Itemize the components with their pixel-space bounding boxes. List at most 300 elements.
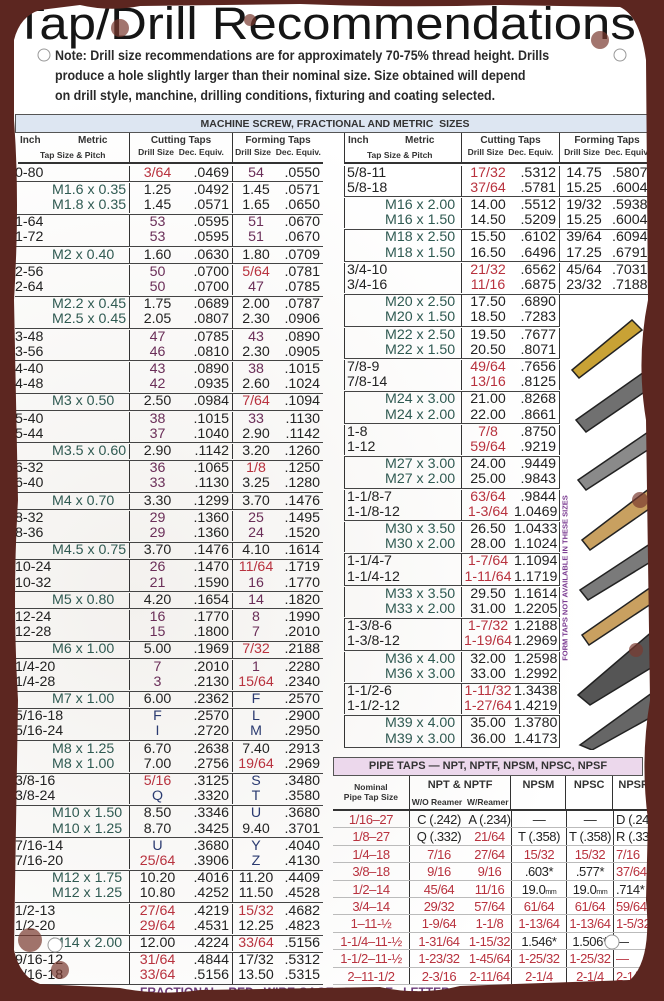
left table: machine screw sizes: 1.45: [242, 182, 270, 198]
left table: machine screw sizes: 5.00: [144, 641, 171, 657]
left table: machine screw sizes: .1654: [193, 592, 229, 608]
left table: machine screw sizes: .1024: [284, 376, 320, 392]
left table: machine screw sizes: 29: [150, 510, 165, 526]
left table: machine screw sizes: 2-64: [15, 279, 43, 295]
left table: machine screw sizes: .4252: [193, 885, 229, 901]
right table: larger sizes: .6562: [520, 262, 556, 278]
pipe taps table: T (.358): [569, 829, 611, 844]
left table: machine screw sizes: 8-36: [15, 525, 43, 541]
left table: machine screw sizes: .1476: [284, 493, 320, 509]
left table: machine screw sizes: .0550: [284, 164, 320, 180]
pipe taps table: 2-3/16: [422, 969, 456, 984]
right table: larger sizes: 25.00: [470, 471, 506, 487]
right table: larger sizes: 1.2188: [514, 618, 557, 634]
left table: machine screw sizes: 15/32: [238, 903, 274, 919]
left table: machine screw sizes: .2570: [193, 708, 229, 724]
right table header: [344, 133, 654, 164]
right table: larger sizes: 3/4-16: [347, 277, 387, 293]
left table: machine screw sizes: .5312: [284, 952, 320, 968]
right table: larger sizes: 19/32: [566, 197, 602, 213]
left table: machine screw sizes: 5/16-24: [15, 723, 63, 739]
left table: machine screw sizes: 25: [248, 510, 264, 526]
pipe taps table: C (.242): [417, 812, 461, 827]
left table: machine screw sizes: .1040: [193, 426, 229, 442]
left table: machine screw sizes: 1/4-28: [15, 674, 55, 690]
right table: larger sizes: 49/64: [470, 359, 506, 375]
left table: machine screw sizes: 50: [150, 264, 165, 280]
left table: machine screw sizes: 4.20: [144, 592, 171, 608]
right table: larger sizes: .6004: [612, 180, 648, 196]
left table: machine screw sizes: 5/64: [242, 264, 270, 280]
right table: larger sizes: 14.50: [470, 212, 506, 228]
left table: machine screw sizes: 47: [150, 329, 165, 345]
left table: machine screw sizes: 9/16-18: [15, 967, 63, 983]
left table: machine screw sizes: .0492: [193, 182, 229, 198]
right table: larger sizes: M18 x 1.50: [385, 245, 455, 261]
left table: machine screw sizes: .0890: [193, 361, 229, 377]
right table: larger sizes: 16.50: [470, 245, 506, 261]
left table: machine screw sizes: 11.50: [239, 885, 273, 901]
right table header: Drill Size Dec. Equiv.: [468, 147, 553, 157]
left table header: Tap Size & Pitch: [40, 150, 106, 160]
left table: machine screw sizes: 2.30: [242, 344, 270, 360]
right table: larger sizes: 7/8-9: [347, 359, 379, 375]
left table: machine screw sizes: .0670: [284, 229, 320, 245]
right table: larger sizes: .7188: [612, 277, 648, 293]
section band: pipe taps: [333, 757, 643, 776]
left table: machine screw sizes: .1614: [284, 542, 320, 558]
right table: larger sizes: 1-3/8-12: [347, 633, 400, 649]
pipe table header: Nominal: [354, 782, 388, 792]
left table: machine screw sizes: .2950: [284, 723, 320, 739]
section band: machine screw: [15, 114, 655, 133]
right table: larger sizes: 1.2969: [514, 633, 557, 649]
left table: machine screw sizes: 15/64: [238, 674, 274, 690]
right table: larger sizes: M20 x 2.50: [385, 294, 455, 310]
section band: machine screw: MACHINE SCREW, FRACTIONAL AND METRIC SIZES: [201, 118, 469, 130]
left table: machine screw sizes: U: [152, 838, 163, 854]
left table: machine screw sizes: .1130: [286, 411, 320, 427]
left table: machine screw sizes: 2.30: [242, 311, 270, 327]
left table: machine screw sizes: .1130: [195, 475, 229, 491]
left table: machine screw sizes: 46: [150, 344, 165, 360]
left table: machine screw sizes: 54: [248, 164, 264, 180]
left table: machine screw sizes: 5-40: [15, 411, 43, 427]
right table: larger sizes: 5/8-11: [347, 164, 386, 180]
left table: machine screw sizes: M7 x 1.00: [52, 691, 114, 707]
right table: larger sizes: 7/8-14: [347, 374, 387, 390]
left table: machine screw sizes: U: [251, 805, 261, 821]
right table: larger sizes: .7656: [520, 359, 556, 375]
left table: machine screw sizes: F: [252, 691, 260, 707]
right table: larger sizes: M30 x 3.50: [385, 521, 455, 537]
right table: larger sizes: 29.50: [470, 586, 506, 602]
left table: machine screw sizes: 10-24: [15, 559, 51, 575]
pipe taps table: 1-25/32: [569, 951, 611, 966]
left table: machine screw sizes: .1094: [284, 393, 320, 409]
pipe taps table: 1–11-½: [351, 916, 391, 931]
left table: machine screw sizes: 42: [150, 376, 165, 392]
right table: larger sizes: 15.50: [470, 229, 506, 245]
left table: machine screw sizes: .0781: [284, 264, 320, 280]
left table: machine screw sizes: .0700: [193, 279, 229, 295]
left table: machine screw sizes: 1/2-20: [15, 918, 55, 934]
left table: machine screw sizes: .0709: [284, 247, 320, 263]
left table: machine screw sizes: 50: [150, 279, 165, 295]
pipe taps table: .714*: [616, 882, 644, 897]
right table: larger sizes: .7677: [520, 327, 556, 343]
left table: machine screw sizes: 3-56: [15, 344, 43, 360]
left table: machine screw sizes: .4409: [284, 870, 320, 886]
pipe taps table: 1-15/32: [469, 934, 510, 949]
right table: larger sizes: .5209: [520, 212, 556, 228]
left table: machine screw sizes: 8.50: [144, 805, 171, 821]
right table: larger sizes: .6102: [520, 229, 556, 245]
pipe taps table: 1-25/32: [518, 951, 560, 966]
left table header: Metric: [78, 135, 107, 146]
left table: machine screw sizes: 3/8-24: [15, 788, 55, 804]
left table: machine screw sizes: .3906: [193, 853, 229, 869]
left table: machine screw sizes: 43: [248, 329, 264, 345]
left table: machine screw sizes: .0469: [193, 164, 229, 180]
right table: larger sizes: 1-8: [347, 424, 368, 440]
left table: machine screw sizes: .2010: [193, 659, 229, 675]
left table: machine screw sizes: 47: [248, 279, 264, 295]
right table: larger sizes: 3/4-10: [347, 262, 387, 278]
right table: larger sizes: 5/8-18: [347, 180, 387, 196]
left table: machine screw sizes: 37: [150, 426, 165, 442]
left table header: Drill Size Dec. Equiv.: [235, 147, 321, 157]
right table: larger sizes: 1-11/64: [464, 569, 512, 585]
right table: larger sizes: 1.2598: [514, 651, 557, 667]
left table: machine screw sizes: .1015: [284, 361, 320, 377]
left table: machine screw sizes: 10.80: [140, 885, 175, 901]
left table: machine screw sizes: .1360: [193, 510, 229, 526]
right table: larger sizes: 63/64: [470, 489, 506, 505]
left table: machine screw sizes: .4823: [284, 918, 320, 934]
right table: larger sizes: 1.1024: [514, 536, 557, 552]
left table: machine screw sizes: .0807: [193, 311, 229, 327]
right table header: Metric: [405, 135, 434, 146]
left table: machine screw sizes: .0571: [284, 182, 320, 198]
right table: larger sizes: 1.4173: [514, 731, 557, 747]
left table: machine screw sizes: M12 x 1.75: [52, 870, 122, 886]
left table: machine screw sizes: .1520: [284, 525, 320, 541]
right table: larger sizes: M27 x 2.00: [385, 471, 455, 487]
right table: larger sizes: 11/16: [471, 277, 505, 293]
left table: machine screw sizes: 8-32: [15, 510, 43, 526]
pipe taps table: 11/16: [475, 882, 504, 897]
pipe taps table: 27/64: [474, 847, 505, 862]
legend: FRACTIONAL - RED WIRE GAGE - PURPLE LETTER SIZE - BLUE: [140, 985, 523, 999]
left table: machine screw sizes: .1770: [193, 609, 229, 625]
left table: machine screw sizes: M3.5 x 0.60: [52, 443, 126, 459]
left table: machine screw sizes: 9.40: [242, 821, 270, 837]
left table: machine screw sizes: 3-48: [15, 329, 43, 345]
left table: machine screw sizes: 33: [248, 411, 264, 427]
pipe taps table: 2-11/64: [469, 969, 510, 984]
right table: larger sizes: 24.00: [470, 456, 506, 472]
pipe taps table: 2-1/4: [616, 969, 644, 984]
left table: machine screw sizes: .0689: [193, 296, 229, 312]
pipe taps table: 57/64: [474, 899, 505, 914]
left table: machine screw sizes: .1470: [193, 559, 229, 575]
left table: machine screw sizes: 38: [150, 411, 165, 427]
right table: larger sizes: 1.1719: [514, 569, 557, 585]
right table: larger sizes: 23/32: [566, 277, 602, 293]
left table: machine screw sizes: .2340: [284, 674, 320, 690]
left table: machine screw sizes: 31/64: [140, 952, 175, 968]
left table: machine screw sizes: M2.2 x 0.45: [52, 296, 126, 312]
left table: machine screw sizes: .1142: [286, 426, 320, 442]
right table: larger sizes: .7283: [520, 309, 556, 325]
pipe taps table: 1.546*: [521, 934, 557, 949]
left table: machine screw sizes: 4-48: [15, 376, 43, 392]
left table: machine screw sizes: 27/64: [140, 903, 175, 919]
left table: machine screw sizes: 14: [248, 592, 264, 608]
right table: larger sizes: 18.50: [470, 309, 506, 325]
left table: machine screw sizes: 1.60: [144, 247, 171, 263]
left table: machine screw sizes: M1.8 x 0.35: [52, 197, 126, 213]
left table: machine screw sizes: .3680: [284, 805, 320, 821]
left table: machine screw sizes: 53: [150, 229, 165, 245]
left table: machine screw sizes: .4219: [193, 903, 229, 919]
pipe taps table: 7/16: [427, 847, 451, 862]
left table: machine screw sizes: .2900: [284, 708, 320, 724]
left table: machine screw sizes: M2 x 0.40: [52, 247, 114, 263]
left table: machine screw sizes: M12 x 1.25: [52, 885, 122, 901]
right table: larger sizes: .9844: [520, 489, 556, 505]
left table: machine screw sizes: .2756: [193, 756, 229, 772]
right table: larger sizes: M24 x 2.00: [385, 407, 455, 423]
left table: machine screw sizes: .1770: [284, 575, 320, 591]
right table: larger sizes: .5312: [520, 164, 556, 180]
right table: larger sizes: 21/32: [470, 262, 506, 278]
right table: larger sizes: 1-1/2-12: [347, 698, 400, 714]
pipe taps table: 1.506*: [572, 934, 608, 949]
right table: larger sizes: 1-1/4-12: [347, 569, 400, 585]
right table: larger sizes: .8071: [520, 342, 556, 358]
pipe taps table: 59/64: [616, 899, 647, 914]
right table: larger sizes: 13/16: [470, 374, 506, 390]
right table: larger sizes: 35.00: [470, 715, 506, 731]
pipe taps table: 1-31/64: [418, 934, 460, 949]
left table: machine screw sizes: 2.50: [144, 393, 171, 409]
right table: larger sizes: M33 x 3.50: [385, 586, 455, 602]
left table: machine screw sizes: 2-56: [15, 264, 43, 280]
left table: machine screw sizes: .3680: [193, 838, 229, 854]
vertical note: form taps not available: FORM TAPS NOT AVAILABLE IN THESE SIZES: [560, 495, 570, 661]
left table: machine screw sizes: .1142: [195, 443, 229, 459]
left table: machine screw sizes: 2.90: [144, 443, 171, 459]
right table: larger sizes: M39 x 3.00: [385, 731, 455, 747]
left table: machine screw sizes: 16: [150, 609, 165, 625]
left table: machine screw sizes: .0906: [284, 311, 320, 327]
pipe taps table: —: [533, 812, 545, 827]
left table: machine screw sizes: .3425: [193, 821, 229, 837]
right table: larger sizes: .6004: [612, 212, 648, 228]
left table: machine screw sizes: Y: [251, 838, 261, 854]
pipe table header: NPSC: [574, 779, 604, 791]
pipe taps table: 1-9/64: [422, 916, 456, 931]
pipe taps table: 1-13/64: [569, 916, 611, 931]
pipe taps table: —: [584, 812, 596, 827]
right table: larger sizes: .5807: [612, 164, 648, 180]
right table: larger sizes: 1.4219: [514, 698, 557, 714]
pipe taps table: 61/64: [524, 899, 554, 914]
right table: larger sizes: 17.25: [566, 245, 602, 261]
note text: on drill style, manchine, drilling conditions, fixturing and coating selected.: [55, 88, 495, 103]
left table: machine screw sizes: 1.25: [144, 182, 171, 198]
right table: larger sizes: M22 x 2.50: [385, 327, 455, 343]
left table: machine screw sizes: .4224: [193, 935, 229, 951]
pipe taps table: 1-13/64: [518, 916, 560, 931]
left table: machine screw sizes: 3.30: [144, 493, 171, 509]
left table: machine screw sizes: 7/16-20: [15, 853, 63, 869]
left table: machine screw sizes: F: [153, 708, 162, 724]
left table: machine screw sizes: .1015: [193, 411, 229, 427]
right table: larger sizes: 1.1094: [514, 553, 557, 569]
left table: machine screw sizes: 1.75: [144, 296, 171, 312]
left table: machine screw sizes: 29/64: [140, 918, 175, 934]
left table: machine screw sizes: .2010: [284, 624, 320, 640]
left table: machine screw sizes: 7.00: [144, 756, 171, 772]
right table: larger sizes: .8750: [520, 424, 556, 440]
pipe taps table: 1-1/2–11-½: [340, 951, 402, 966]
left table: machine screw sizes: .0810: [193, 344, 229, 360]
left table: machine screw sizes: 10.20: [140, 870, 175, 886]
pipe taps table: 15/32: [524, 847, 554, 862]
left table: machine screw sizes: 1/4-20: [15, 659, 55, 675]
left table: machine screw sizes: .1260: [284, 443, 320, 459]
right table: larger sizes: 14.00: [470, 197, 506, 213]
left table: machine screw sizes: .1969: [193, 641, 229, 657]
left table: machine screw sizes: 7.40: [242, 741, 270, 757]
left table: machine screw sizes: 7: [154, 659, 161, 675]
left table: machine screw sizes: .0650: [284, 197, 320, 213]
pipe taps table: 1/8–27: [352, 829, 390, 844]
pipe table header: NPT & NPTF: [428, 779, 492, 791]
pipe taps table: 9/16: [427, 864, 451, 879]
left table: machine screw sizes: .1590: [193, 575, 229, 591]
right table: larger sizes: 1-3/64: [468, 504, 508, 520]
right table: larger sizes: 39/64: [566, 229, 602, 245]
right table: larger sizes: .9449: [520, 456, 556, 472]
left table: machine screw sizes: .2969: [284, 756, 320, 772]
left table: machine screw sizes: M14 x 2.00: [52, 935, 122, 951]
pipe taps table: 2-1/4: [576, 969, 604, 984]
right table: larger sizes: M24 x 3.00: [385, 391, 455, 407]
left table: machine screw sizes: .5315: [284, 967, 320, 983]
left table header: Cutting Taps: [151, 135, 211, 146]
left table: machine screw sizes: .1495: [284, 510, 320, 526]
right table: larger sizes: .9219: [520, 439, 556, 455]
left table: machine screw sizes: .0935: [193, 376, 229, 392]
left table: machine screw sizes: 25/64: [140, 853, 175, 869]
pipe taps table: 61/64: [575, 899, 605, 914]
right table: larger sizes: .5781: [520, 180, 556, 196]
pipe table header: Pipe Tap Size: [344, 792, 398, 802]
left table: machine screw sizes: 13.50: [238, 967, 274, 983]
left table: machine screw sizes: 3/8-16: [15, 773, 55, 789]
left table: machine screw sizes: .0670: [284, 214, 320, 230]
right table: larger sizes: 21.00: [470, 391, 506, 407]
pipe taps table: 21/64: [474, 829, 505, 844]
left table: machine screw sizes: .0571: [193, 197, 229, 213]
pipe taps table: Q (.332): [417, 829, 461, 844]
right table: larger sizes: 15.25: [566, 180, 602, 196]
left table: machine screw sizes: 7/32: [242, 641, 270, 657]
left table: machine screw sizes: .2720: [193, 723, 229, 739]
left table: machine screw sizes: 0-80: [15, 164, 43, 180]
left table: machine screw sizes: 21: [150, 575, 165, 591]
right table: larger sizes: .6875: [520, 277, 556, 293]
right table: larger sizes: 1-27/64: [464, 698, 512, 714]
left table: machine screw sizes: I: [156, 723, 159, 739]
left table: machine screw sizes: .4040: [284, 838, 320, 854]
left table: machine screw sizes: 3/64: [144, 164, 171, 180]
right table: larger sizes: 20.50: [470, 342, 506, 358]
left table: machine screw sizes: T: [252, 788, 260, 804]
left table: machine screw sizes: .0630: [193, 247, 229, 263]
left table: machine screw sizes: 29: [150, 525, 165, 541]
left table: machine screw sizes: 33/64: [238, 935, 274, 951]
left table: machine screw sizes: 1.45: [144, 197, 171, 213]
right table: larger sizes: 15.25: [566, 212, 602, 228]
left table: machine screw sizes: 10-32: [15, 575, 51, 591]
pipe taps table: 1-5/32: [616, 916, 650, 931]
left table: machine screw sizes: 8: [252, 609, 260, 625]
right table: larger sizes: .6890: [520, 294, 556, 310]
left table: machine screw sizes: 6.70: [144, 741, 171, 757]
right table: larger sizes: 22.00: [470, 407, 506, 423]
left table: machine screw sizes: .0785: [284, 279, 320, 295]
right table: larger sizes: 1-7/32: [468, 618, 508, 634]
pipe taps table: A (.234): [468, 812, 511, 827]
left table: machine screw sizes: 6.00: [144, 691, 171, 707]
left table: machine screw sizes: 3.25: [242, 475, 270, 491]
left table: machine screw sizes: M1.6 x 0.35: [52, 182, 126, 198]
left table: machine screw sizes: 8.70: [144, 821, 171, 837]
left table: machine screw sizes: M8 x 1.00: [52, 756, 114, 772]
left table: machine screw sizes: .0700: [193, 264, 229, 280]
right table: larger sizes: M16 x 1.50: [385, 212, 455, 228]
left table: machine screw sizes: 33/64: [140, 967, 175, 983]
left table header: Forming Taps: [245, 135, 311, 146]
right table: larger sizes: M16 x 2.00: [385, 197, 455, 213]
pipe taps table: 29/32: [424, 899, 454, 914]
left table: machine screw sizes: 5/16: [144, 773, 171, 789]
left table: machine screw sizes: 1.80: [242, 247, 270, 263]
left table: machine screw sizes: 3: [154, 674, 161, 690]
left table: machine screw sizes: S: [251, 773, 261, 789]
left table: machine screw sizes: 5/16-18: [15, 708, 63, 724]
left table: machine screw sizes: .3580: [284, 788, 320, 804]
pipe table header: W/O Reamer W/Reamer: [412, 797, 509, 807]
left table: machine screw sizes: 3.70: [144, 542, 171, 558]
right table: larger sizes: M27 x 3.00: [385, 456, 455, 472]
right table: larger sizes: 26.50: [470, 521, 506, 537]
pipe taps table: 19.0mm: [573, 882, 607, 897]
left table: machine screw sizes: 11/64: [239, 559, 273, 575]
pipe taps table: 1-45/64: [469, 951, 510, 966]
right table: larger sizes: M20 x 1.50: [385, 309, 455, 325]
right table: larger sizes: .8268: [520, 391, 556, 407]
left table: machine screw sizes: .3320: [193, 788, 229, 804]
note text: [55, 48, 549, 103]
pipe taps table: 19.0mm: [522, 882, 556, 897]
right table: larger sizes: .5938: [612, 197, 648, 213]
